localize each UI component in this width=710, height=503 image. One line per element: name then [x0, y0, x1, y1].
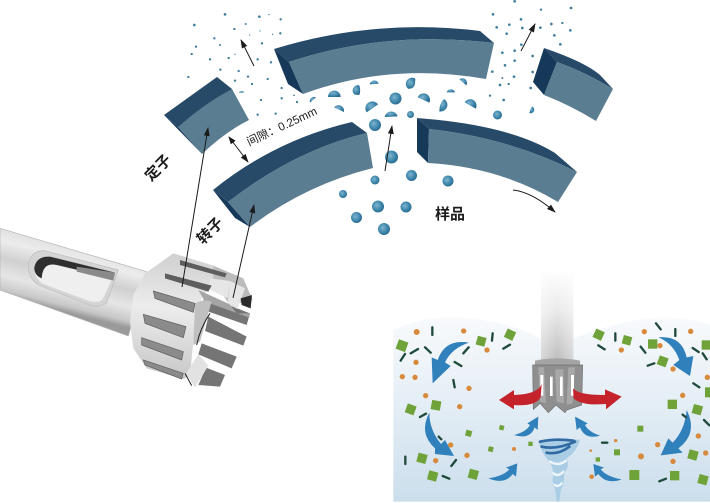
panel: mixing flow diagram — [393, 270, 710, 502]
shaft slot — [28, 251, 118, 306]
arrow: rotation direction — [513, 190, 555, 212]
arrow: particles up right — [521, 24, 535, 51]
mixer head — [533, 358, 583, 413]
red arrows — [499, 384, 622, 409]
fluid body — [393, 317, 710, 502]
rotor head — [130, 253, 253, 388]
green square particles — [396, 328, 710, 485]
arrow: particles up centre — [385, 126, 392, 171]
label: rotor: 转子 — [194, 215, 227, 248]
arrow: gap — [229, 137, 248, 162]
head body — [130, 253, 216, 379]
rear ring — [213, 266, 253, 305]
slots — [165, 260, 227, 292]
tooth faces — [207, 278, 245, 309]
arrow: rotor pointer — [233, 205, 254, 298]
vortex — [538, 439, 580, 502]
blue spheres — [339, 92, 502, 235]
small particles right — [489, 0, 572, 101]
rotor segment: lower right — [417, 118, 577, 202]
dark rod particles — [401, 323, 709, 481]
small particles left — [187, 13, 298, 116]
label: stator: 定子 — [141, 151, 175, 185]
fingers — [198, 295, 250, 387]
rotor edge line — [185, 313, 210, 386]
orange particles — [400, 328, 710, 479]
rotor segment: lower left — [213, 122, 373, 227]
vertical shaft — [541, 270, 573, 360]
arrow: particles up left — [241, 40, 254, 66]
blue circulation arrows — [425, 337, 693, 481]
half sphere fragments — [239, 78, 430, 117]
label: sample: 样品 — [435, 205, 465, 223]
label: gap size: 间隙：0.25mm — [244, 104, 319, 149]
arrow: stator pointer — [182, 128, 208, 287]
rotor-stator shaft photo — [0, 228, 253, 388]
stator segment: upper centre large — [274, 27, 494, 94]
stator segment: upper right small — [533, 48, 613, 121]
stator segment: upper left small — [164, 77, 249, 154]
shaft tube — [0, 228, 147, 336]
